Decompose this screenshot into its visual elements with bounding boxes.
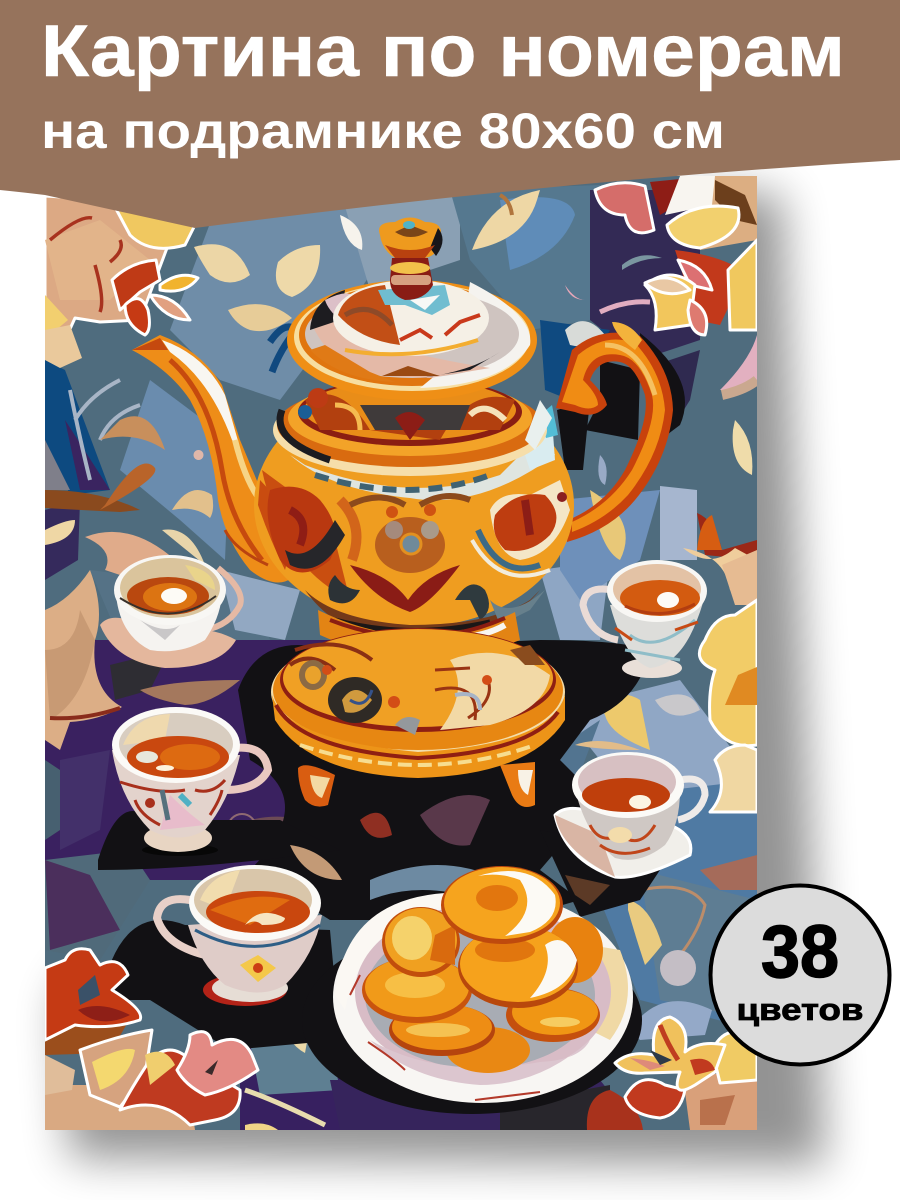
badge: colour count <box>710 886 890 1064</box>
background: lower leaves over shadow <box>290 795 610 905</box>
teapot handle <box>556 322 673 542</box>
cup: middle right <box>555 752 705 877</box>
teapot lid <box>287 280 537 400</box>
flower: left beige leaf <box>45 570 122 750</box>
teapot knob <box>379 218 443 300</box>
teapot body <box>254 405 574 630</box>
cup: lower left <box>157 865 322 1006</box>
badge number: 38 <box>761 910 839 993</box>
painting: tea set on floral background <box>45 176 757 1130</box>
flower: top left <box>45 196 198 368</box>
cup: upper right <box>583 560 707 678</box>
badge label: цветов <box>736 992 864 1027</box>
flower: right side yellow <box>683 513 757 812</box>
flower: bottom left <box>45 949 325 1130</box>
title: Картина по номерам <box>41 11 845 92</box>
cup: upper left <box>100 555 241 668</box>
teapot spout <box>132 335 292 582</box>
cup: middle left <box>112 707 268 856</box>
plate of pancakes <box>333 866 633 1103</box>
shadows: black cast under tea set <box>98 333 685 1114</box>
background: painted colour fields <box>45 185 757 1130</box>
flower: bottom right <box>587 1017 757 1130</box>
pancakes <box>362 866 603 1073</box>
subtitle: на подрамнике 80х60 см <box>41 103 725 159</box>
samovar base <box>271 610 565 807</box>
banner <box>0 0 900 228</box>
teapot <box>132 218 673 640</box>
flower: top right <box>595 176 757 335</box>
canvas drop shadow <box>60 190 825 1165</box>
teapot neck <box>273 378 552 476</box>
background: leaves and sprigs <box>45 182 757 1040</box>
